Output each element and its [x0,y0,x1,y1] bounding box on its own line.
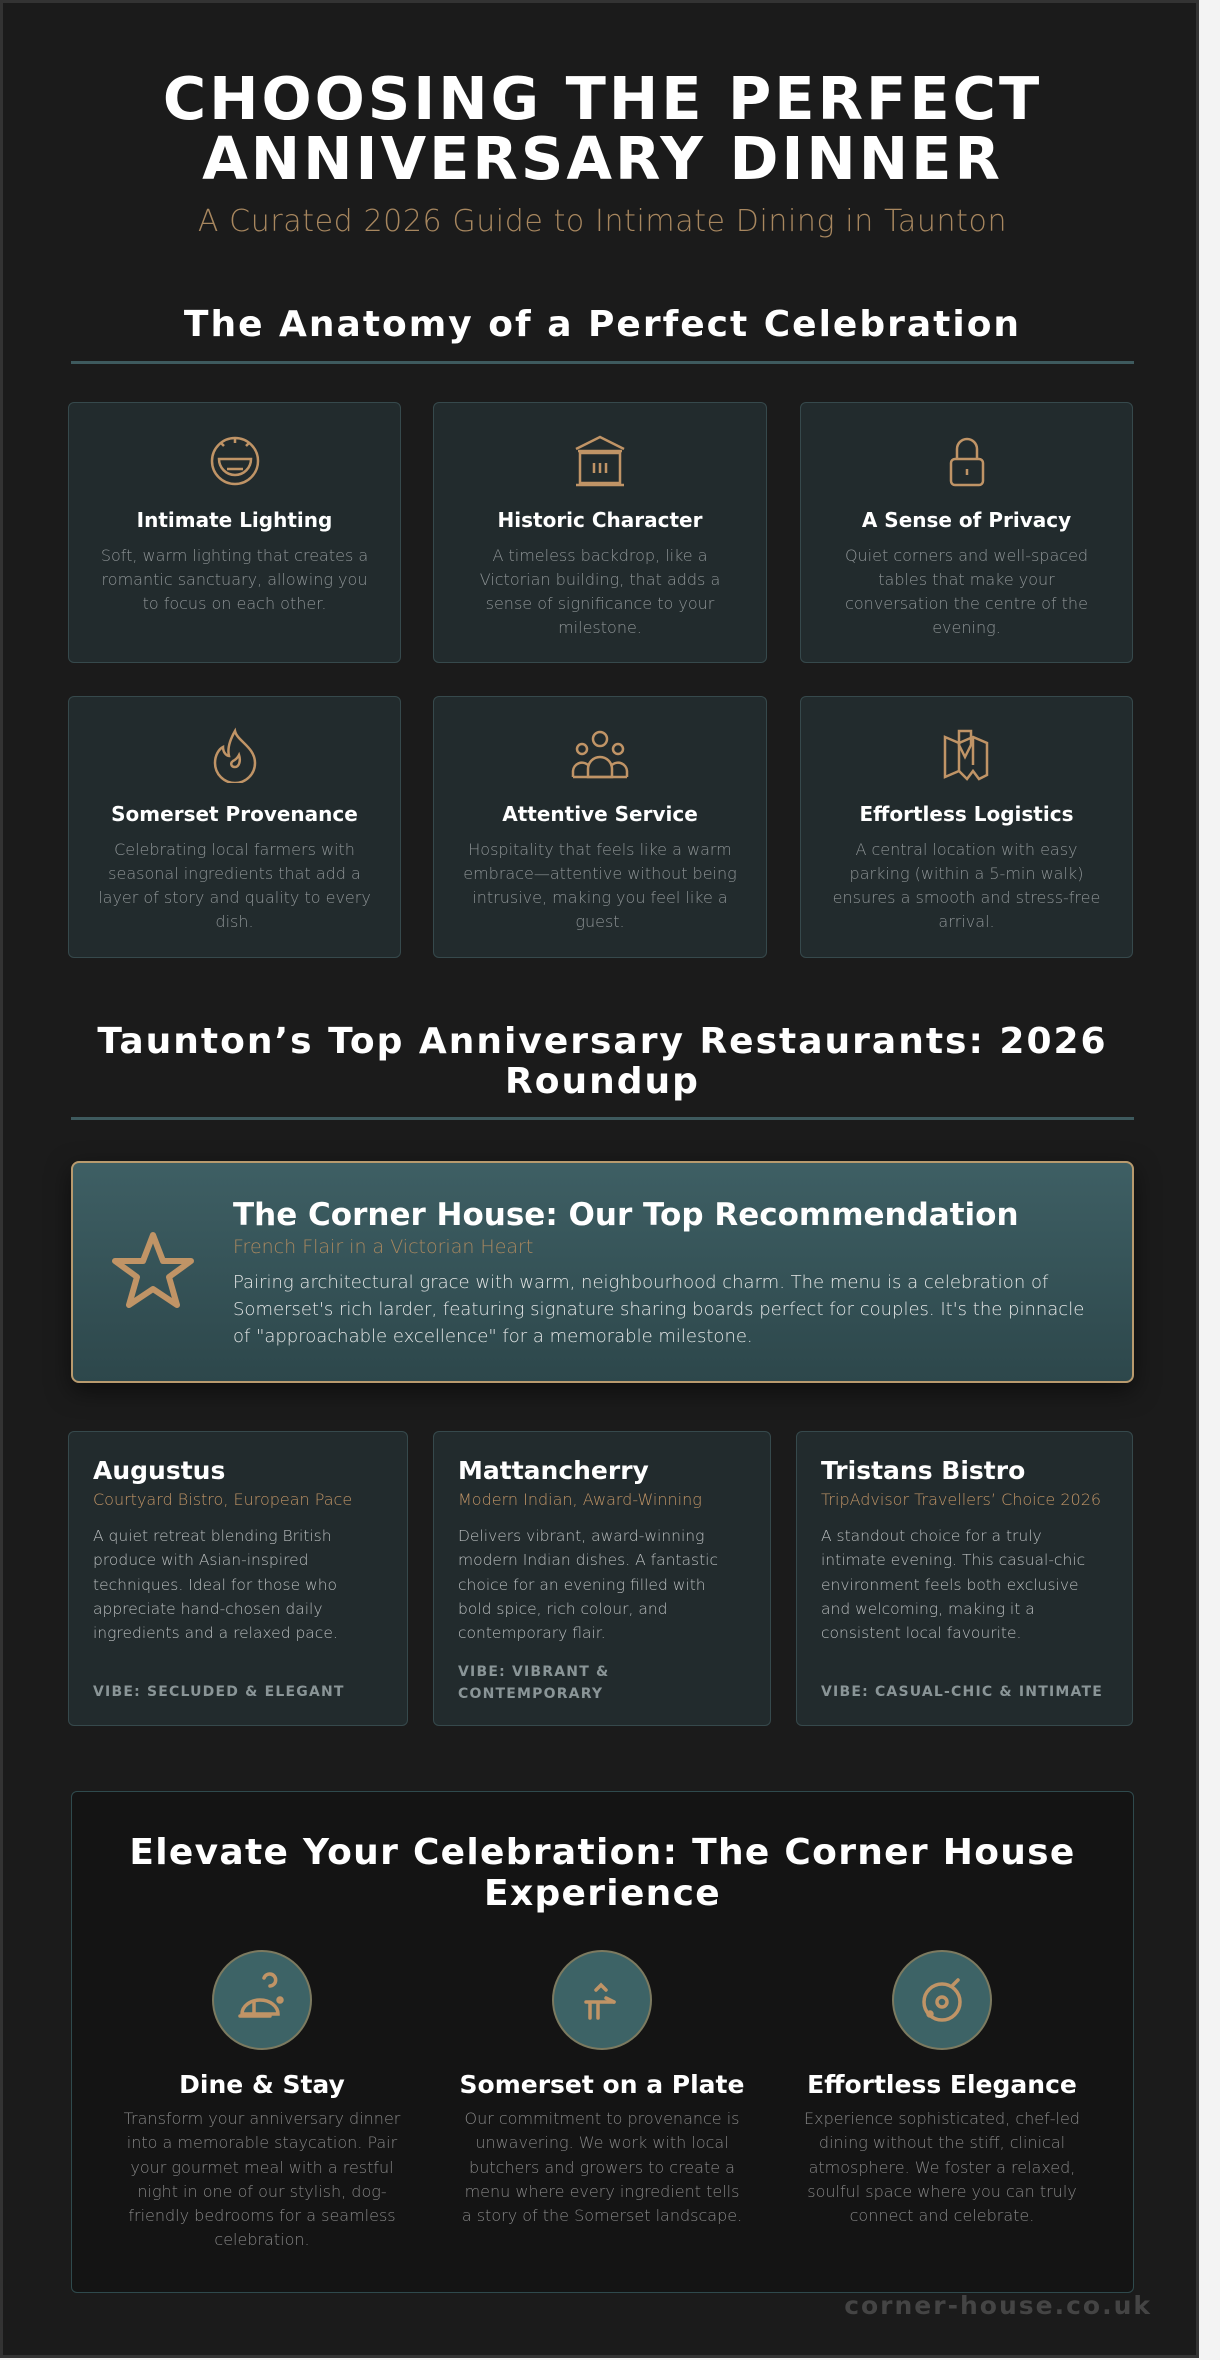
footer: website: corner-house.co.uk [844,2291,1152,2320]
card: intimate lighting [68,402,401,663]
panel heading: Elevate Your Celebration: The Corner House [129,1832,1076,1873]
panel: elevate your celebration: Experience sophisticated, chef-led dining without the stiff, clinical atmosphere. We foster a relaxed, soulful space where you can truly connect and celebrate. [804,2109,1080,2225]
restaurant card: mattancherry: VIBE: VIBRANT & [458,1664,609,1680]
restaurant card: mattancherry: Mattancherry [458,1456,649,1485]
heading: top restaurants [97,1021,1108,1102]
restaurant card: mattancherry: Delivers vibrant, award-winning modern Indian dishes. A fantastic choice for an evening filled with bold spice, rich colour, and contemporary flair. [458,1527,718,1642]
panel: elevate your celebration: Transform your anniversary dinner into a memorable staycation. Pair your gourmet meal with a restful night in one of our stylish, dog-friendly bedrooms for a seamless celebration. [124,2109,400,2249]
card: privacy [800,402,1133,663]
restaurant card: tristans [796,1431,1133,1726]
heading: top restaurants: Roundup [505,1061,700,1102]
card: attentive service: Attentive Service [502,802,698,826]
card: attentive service: Hospitality that feels like a warm embrace—attentive without being intrusive, making you feel like a guest. [463,840,737,931]
icon: bed [212,1950,312,2050]
featured body: Pairing architectural grace with warm, neighbourhood charm. The menu is a celebration of Somerset's rich larder, featuring signature sharing boards perfect for couples. It's the pinnacle of "approachable excellence" for a memorable milestone. [233,1272,1084,1347]
restaurant card: mattancherry [433,1431,771,1726]
panel: elevate your celebration: Effortless Elegance [807,2070,1077,2099]
restaurant card: tristans: TripAdvisor Travellers’ Choice 2026 [821,1490,1101,1509]
restaurant card: tristans: Tristans Bistro [821,1456,1025,1485]
panel: elevate your celebration [71,1791,1134,2293]
card: privacy: Quiet corners and well-spaced tables that make your conversation the centre of the evening. [845,546,1088,637]
icon: building [576,436,624,486]
feature: dine & stay [124,1950,400,2249]
restaurant card: augustus: Courtyard Bistro, European Pace [93,1490,352,1509]
featured title: The Corner House: Our Top Recommendation [233,1197,1019,1233]
restaurant card: mattancherry: Modern Indian, Award-Winning [458,1490,702,1509]
card: logistics: Effortless Logistics [860,802,1073,826]
title: CHOOSING THE PERFECT [163,64,1042,133]
card: somerset provenance: Celebrating local farmers with seasonal ingredients that add a layer of story and quality to every dish. [98,840,371,931]
feature: effortless elegance [804,1950,1080,2225]
restaurant card: tristans: VIBE: CASUAL-CHIC & INTIMATE [821,1684,1103,1700]
panel: elevate your celebration: Our commitment to provenance is unwavering. We work with local butchers and growers to create a menu where every ingredient tells a story of the Somerset landscape. [462,2109,742,2225]
restaurant card: augustus: Augustus [93,1456,225,1485]
panel heading: Experience [484,1873,721,1914]
feature: somerset on a plate [460,1950,744,2225]
subtitle: A Curated 2026 Guide to Intimate Dining in Taunton [198,204,1007,239]
card: privacy: A Sense of Privacy [862,508,1071,532]
card: intimate lighting: Soft, warm lighting that creates a romantic sanctuary, allowing you to focus on each other. [101,546,368,613]
icon: disc [892,1950,992,2050]
icon: lamp [210,436,260,486]
card: historic character [433,402,767,663]
restaurant card: augustus: A quiet retreat blending British produce with Asian-inspired techniques. Ideal for those who appreciate hand-chosen daily ingredients and a relaxed pace. [93,1527,338,1642]
icon: plate [552,1950,652,2050]
icon: flame [214,728,256,783]
icon: map [944,730,988,781]
card: historic character: Historic Character [498,508,702,532]
restaurant card: tristans: A standout choice for a truly intimate evening. This casual-chic environment feels both exclusive and welcoming, making it a consistent local favourite. [821,1527,1085,1642]
card: intimate lighting: Intimate Lighting [137,508,332,532]
title [163,64,1042,193]
card: attentive service [433,696,767,958]
card: logistics: A central location with easy parking (within a 5-min walk) ensures a smooth and stress-free arrival. [833,840,1100,931]
heading: anatomy: The Anatomy of a Perfect Celebration [184,304,1021,345]
featured: corner house [71,1161,1134,1383]
icon: lock [950,438,984,486]
panel: elevate your celebration: Somerset on a Plate [460,2070,744,2099]
card: logistics [800,696,1133,958]
restaurant card: mattancherry: CONTEMPORARY [458,1686,603,1702]
title: ANNIVERSARY DINNER [202,124,1003,193]
panel heading [129,1832,1076,1914]
heading: top restaurants: Taunton’s Top Anniversary Restaurants: 2026 [97,1021,1108,1062]
panel: elevate your celebration: Dine & Stay [179,2070,345,2099]
icon: people [572,730,628,778]
icon: star [112,1232,194,1308]
restaurant card: augustus: VIBE: SECLUDED & ELEGANT [93,1684,345,1700]
card: historic character: A timeless backdrop, like a Victorian building, that adds a sense of significance to your milestone. [480,546,720,637]
restaurant card: augustus [68,1431,408,1726]
featured subtitle: French Flair in a Victorian Heart [233,1236,533,1258]
card: somerset provenance [68,696,401,958]
card: somerset provenance: Somerset Provenance [111,802,358,826]
